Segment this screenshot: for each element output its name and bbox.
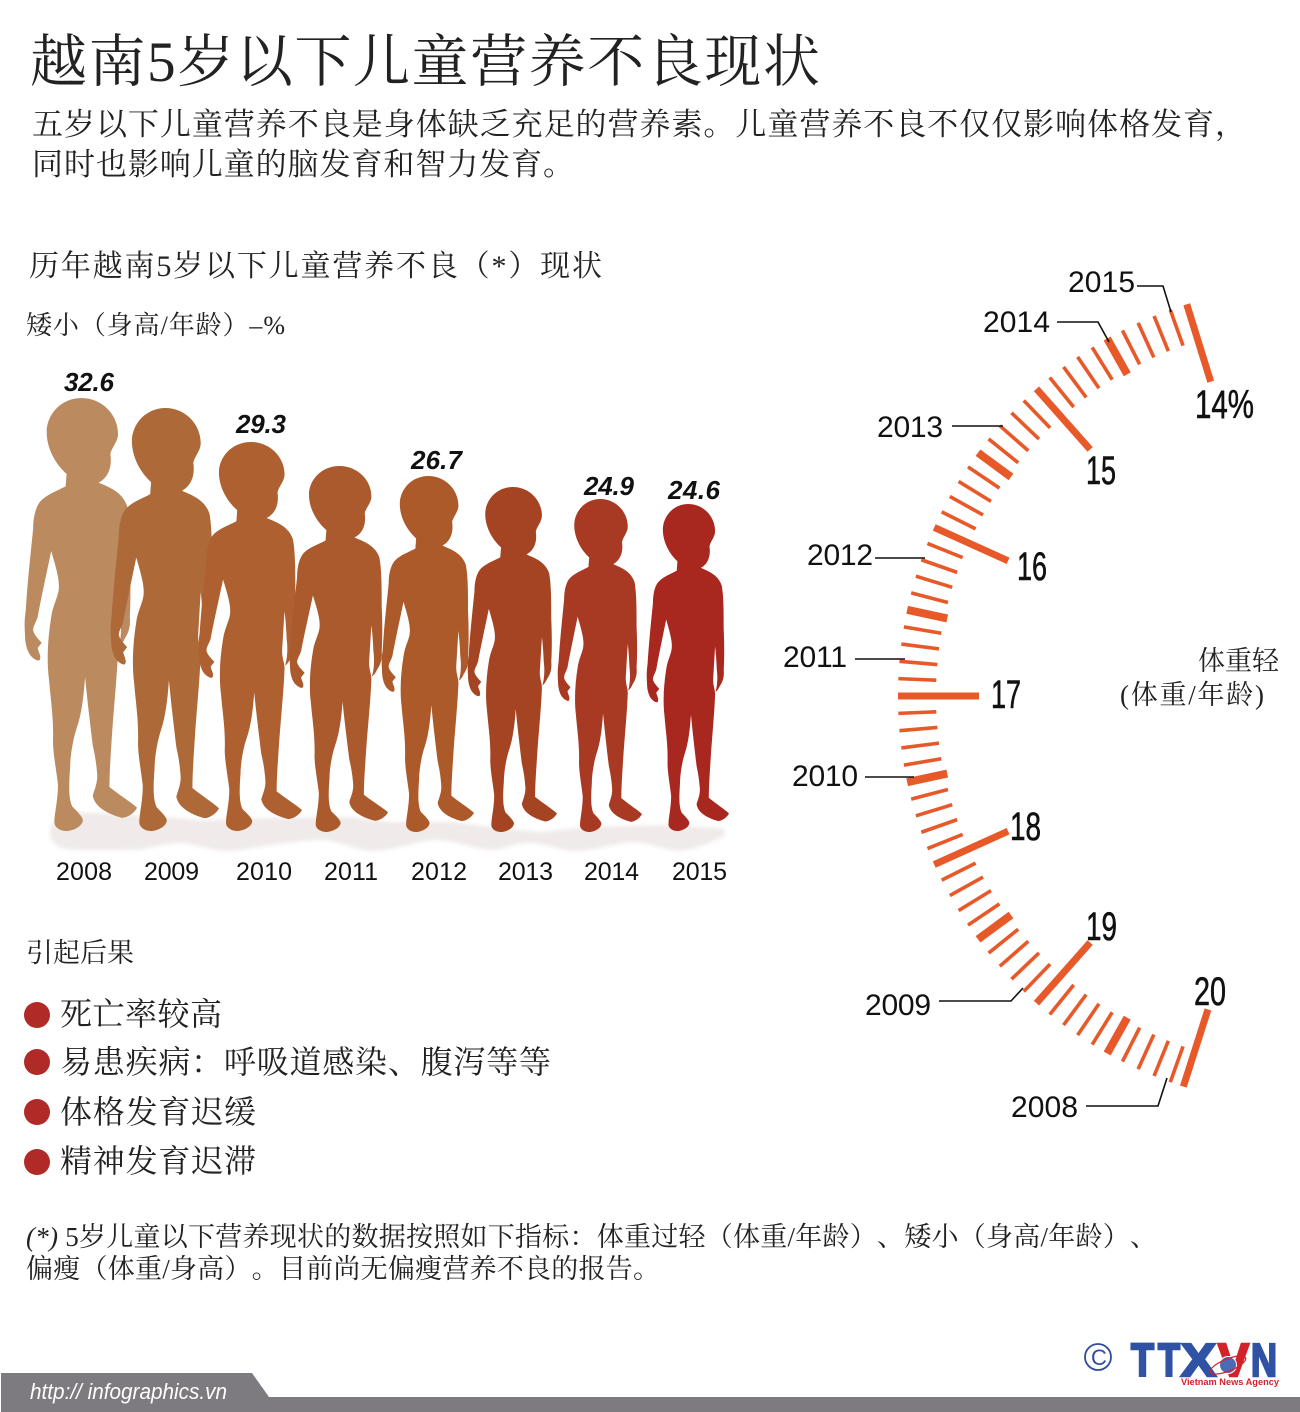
gauge year labels bbox=[783, 266, 1135, 1124]
gauge value labels: 20 bbox=[1194, 970, 1226, 1014]
year labels: 2009 bbox=[144, 858, 199, 886]
consequences list bbox=[24, 996, 551, 1179]
logo wordmark: T bbox=[1158, 1334, 1180, 1386]
value labels: 29.3 bbox=[235, 409, 287, 439]
footnote: 偏瘦（体重/身高）。目前尚无偏瘦营养不良的报告。 bbox=[26, 1254, 660, 1284]
logo wordmark: V bbox=[1218, 1334, 1249, 1386]
logo: TTXVN bbox=[1085, 1334, 1280, 1388]
gauge value labels: 18 bbox=[1010, 805, 1041, 849]
footnote: (*) 5岁儿童以下营养现状的数据按照如下指标：体重过轻（体重/年龄）、矮小（身高/年龄）、 bbox=[26, 1222, 1157, 1252]
underweight caption: 体重轻 bbox=[1198, 646, 1280, 676]
gauge year labels: 2013 bbox=[877, 411, 943, 444]
year labels: 2010 bbox=[236, 858, 292, 886]
gauge value labels: 16 bbox=[1017, 545, 1047, 589]
gauge ticks bbox=[898, 304, 1211, 1087]
figure 2012 bbox=[382, 476, 474, 832]
value labels: 24.9 bbox=[583, 471, 635, 501]
logo globe bbox=[1208, 1352, 1248, 1378]
stunting sub-heading: 矮小（身高/年龄）–% bbox=[26, 311, 285, 340]
copyright mark: C bbox=[1091, 1345, 1107, 1370]
title: 越南5岁以下儿童营养不良现状 bbox=[30, 31, 820, 94]
figure 2010 bbox=[199, 442, 302, 831]
figure 2015 bbox=[647, 504, 729, 831]
bullet: mental delay: 精神发育迟滞 bbox=[60, 1143, 256, 1179]
gauge year labels: 2011 bbox=[783, 641, 847, 674]
footer bar bbox=[1, 1373, 1300, 1412]
year labels: 2011 bbox=[324, 858, 378, 886]
underweight caption bbox=[1120, 646, 1280, 710]
gauge value labels: 17 bbox=[991, 673, 1021, 717]
figure 2014 bbox=[558, 499, 642, 832]
leader lines bbox=[855, 286, 1171, 1106]
gauge year labels: 2008 bbox=[1011, 1091, 1078, 1124]
panel: stunting chart of child silhouettes bbox=[25, 367, 729, 886]
intro text: 同时也影响儿童的脑发育和智力发育。 bbox=[32, 147, 574, 182]
copyright mark bbox=[1085, 1344, 1111, 1370]
year labels: 2015 bbox=[672, 858, 727, 886]
year labels: 2008 bbox=[56, 858, 112, 886]
value labels: 24.6 bbox=[667, 475, 721, 505]
figure 2013 bbox=[468, 487, 557, 832]
gauge value labels: 15 bbox=[1086, 449, 1116, 493]
consequences heading: 引起后果 bbox=[26, 938, 134, 968]
bullet: higher mortality: 死亡率较高 bbox=[60, 996, 222, 1032]
bullet: disease: 易患疾病：呼吸道感染、腹泻等等 bbox=[60, 1044, 551, 1080]
figure 2009 bbox=[111, 408, 219, 831]
year labels: 2012 bbox=[411, 858, 467, 886]
panel: underweight gauge bbox=[783, 266, 1280, 1124]
ground shadow bbox=[50, 812, 725, 851]
value labels bbox=[64, 367, 721, 505]
logo wordmark: N bbox=[1251, 1334, 1277, 1386]
chart heading: 历年越南5岁以下儿童营养不良（*）现状 bbox=[29, 250, 602, 283]
gauge year labels: 2015 bbox=[1068, 266, 1135, 299]
footer url: http:// infographics.vn bbox=[30, 1379, 227, 1404]
value labels: 32.6 bbox=[64, 367, 115, 397]
bullet: physical delay: 体格发育迟缓 bbox=[60, 1094, 256, 1130]
figure 2008 bbox=[25, 398, 137, 831]
gauge value labels: 14% bbox=[1195, 383, 1254, 427]
year labels bbox=[56, 858, 727, 886]
intro text bbox=[32, 107, 1246, 182]
gauge value labels bbox=[991, 383, 1254, 1014]
logo wordmark bbox=[1131, 1334, 1277, 1386]
intro text: 五岁以下儿童营养不良是身体缺乏充足的营养素。儿童营养不良不仅仅影响体格发育， bbox=[32, 107, 1246, 142]
logo wordmark: T bbox=[1131, 1334, 1154, 1386]
gauge value labels: 19 bbox=[1086, 905, 1117, 949]
year labels: 2013 bbox=[498, 858, 553, 886]
logo tagline: Vietnam News Agency bbox=[1181, 1377, 1280, 1388]
logo wordmark: X bbox=[1181, 1334, 1216, 1386]
year labels: 2014 bbox=[584, 858, 639, 886]
gauge year labels: 2014 bbox=[983, 306, 1050, 339]
value labels: 26.7 bbox=[410, 445, 464, 475]
gauge year labels: 2009 bbox=[865, 989, 931, 1022]
underweight caption: (体重/年龄) bbox=[1120, 680, 1264, 710]
footnote bbox=[26, 1222, 1157, 1284]
gauge year labels: 2012 bbox=[807, 539, 873, 572]
gauge year labels: 2010 bbox=[792, 760, 858, 793]
figure 2011 bbox=[290, 466, 388, 832]
